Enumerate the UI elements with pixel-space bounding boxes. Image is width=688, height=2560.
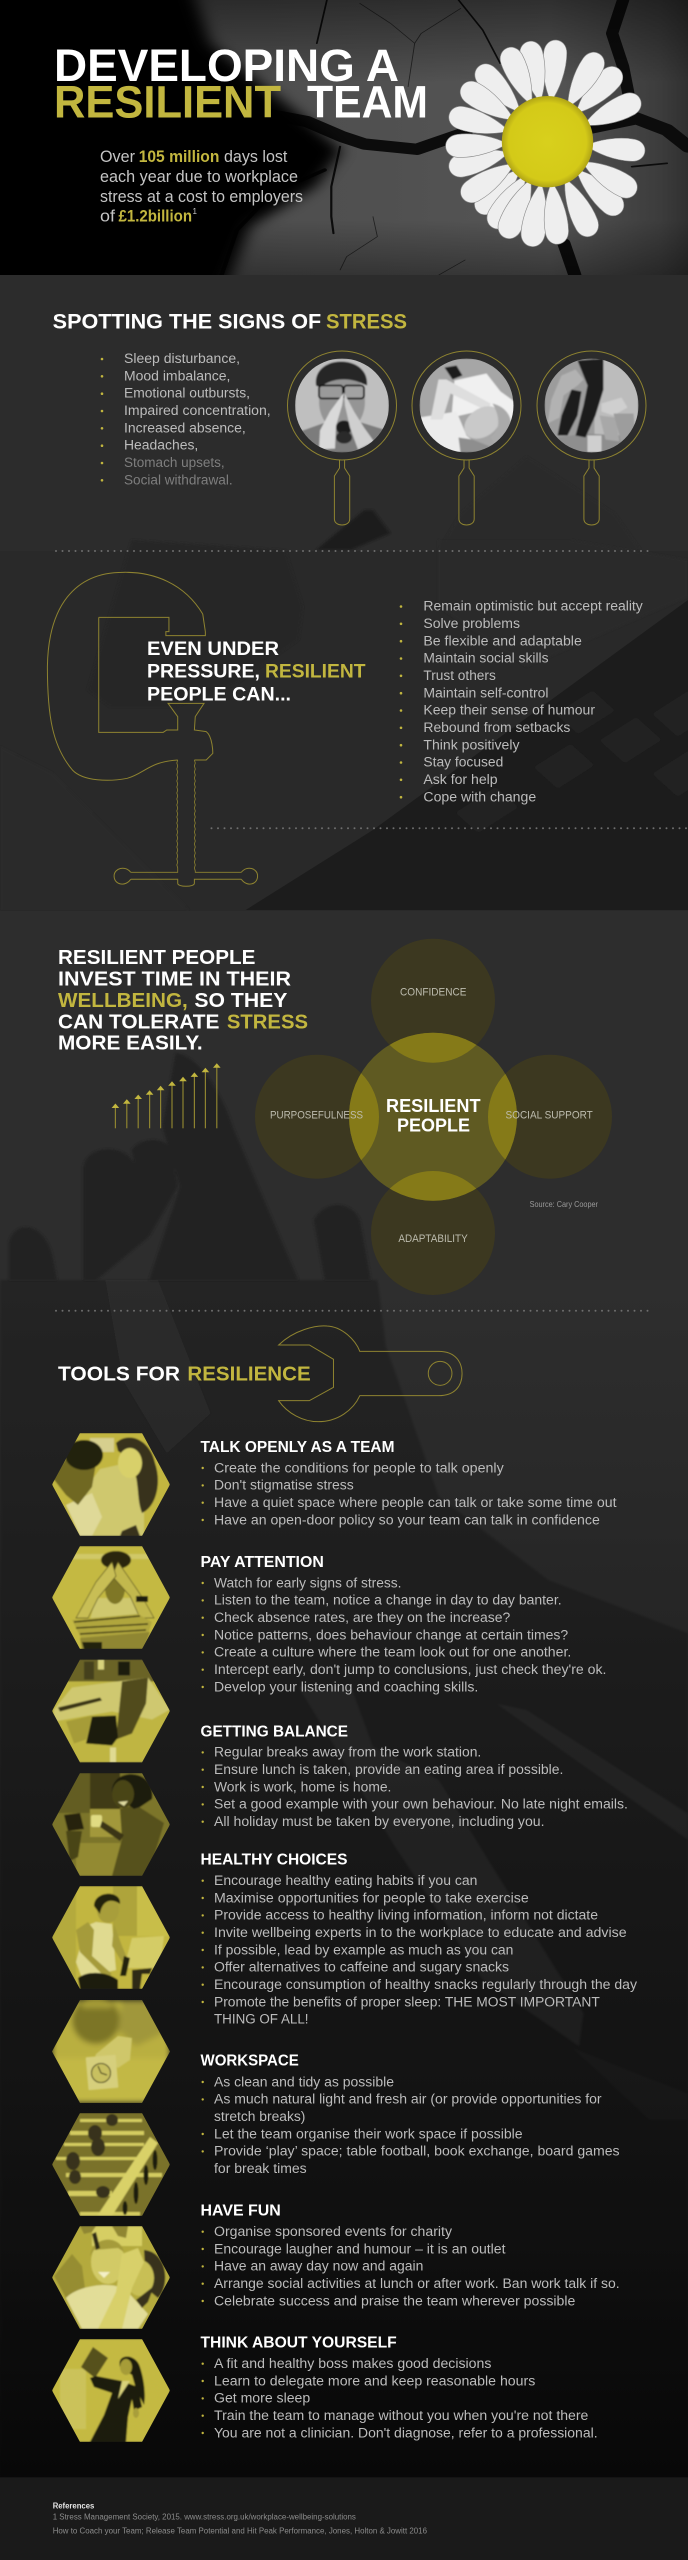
text block: intro statistic (100, 147, 303, 226)
heading: even under pressure: PEOPLE CAN... (147, 684, 291, 705)
text block: pay attention: PAY ATTENTION (200, 1554, 324, 1571)
panel: resilient people can background (0, 540, 688, 911)
image: hexagon table football (52, 2113, 170, 2216)
text block: intro statistic: 1 (192, 207, 198, 216)
labels: venn text: SOCIAL SUPPORT (506, 1110, 593, 1122)
heading: spotting the signs of stress: SPOTTING THE SIGNS OF (53, 310, 321, 334)
circle: purposefulness (255, 1055, 379, 1179)
icon: g-clamp outline (47, 572, 258, 886)
text block: think about yourself: You are not a clinician. Don't diagnose, refer to a professional. (214, 2425, 598, 2440)
text block: think about yourself: Get more sleep (214, 2391, 310, 2406)
labels: venn text: ADAPTABILITY (398, 1233, 468, 1245)
chart: resilient people venn diagram (255, 939, 612, 1295)
text block: healthy choices: Provide access to healthy living information, inform not dictate (214, 1908, 598, 1923)
heading: wellbeing statement: STRESS (227, 1010, 308, 1033)
circle: confidence (371, 939, 495, 1063)
icon: mirror with stressed man (288, 351, 396, 525)
text block: have fun: Celebrate success and praise the team wherever possible (214, 2293, 575, 2308)
text block: workspace: As much natural light and fresh air (or provide opportunities for (214, 2092, 602, 2107)
heading: wellbeing statement: CAN TOLERATE (58, 1010, 219, 1033)
heading: wellbeing statement (58, 946, 308, 1054)
title: DEVELOPING A (54, 40, 399, 91)
circle: adaptability (371, 1171, 495, 1295)
panel: tools background (0, 1053, 688, 2480)
list: signs of stress: Impaired concentration, (124, 403, 271, 418)
list: what resilient people can do: Remain optimistic but accept reality (423, 599, 643, 614)
title: TEAM (307, 76, 428, 128)
text block: think about yourself: A fit and healthy boss makes good decisions (214, 2356, 492, 2371)
text block: intro statistic: days lost (224, 147, 288, 166)
text block: talk openly: TALK OPENLY AS A TEAM (200, 1439, 394, 1456)
text block: talk openly: Create the conditions for people to talk openly (214, 1460, 504, 1475)
image: hexagon celebrating man (52, 2226, 170, 2329)
heading: wellbeing statement: INVEST TIME IN THEIR (58, 967, 291, 990)
list: what resilient people can do: Stay focused (423, 755, 503, 770)
text block: healthy choices: THING OF ALL! (214, 2012, 308, 2027)
text block: have fun: Organise sponsored events for charity (214, 2224, 452, 2239)
text block: think about yourself: Learn to delegate more and keep reasonable hours (214, 2373, 536, 2388)
image: hexagon stressed man at desk (52, 1546, 170, 1649)
labels: venn text: RESILIENT (386, 1096, 480, 1116)
icon: spanner outline (279, 1326, 462, 1422)
text block: pay attention (200, 1554, 606, 1694)
text block: think about yourself: Train the team to manage without you when you're not there (214, 2408, 588, 2423)
text block: have fun: Encourage laugher and humour – it is an outlet (214, 2241, 506, 2256)
list: what resilient people can do: Solve problems (423, 616, 520, 631)
heading: tools for resilience (58, 1363, 311, 1386)
list: signs of stress: Headaches, (124, 438, 198, 453)
text block: intro statistic: £1.2billion (118, 207, 192, 226)
text block: workspace: stretch breaks) (214, 2109, 305, 2124)
text block: source credit: Source: Cary Cooper (530, 1200, 598, 1209)
text block: references: References (53, 2501, 95, 2510)
text block: pay attention: Notice patterns, does behaviour change at certain times? (214, 1627, 568, 1642)
panel: signs of stress background (0, 275, 688, 551)
text block: think about yourself: THINK ABOUT YOURSELF (200, 2334, 397, 2351)
text block: getting balance: Ensure lunch is taken, provide an eating area if possible. (214, 1762, 563, 1777)
chart: rising arrows (112, 1063, 221, 1128)
text block: healthy choices: Promote the benefits of proper sleep: THE MOST IMPORTANT (214, 1994, 600, 2009)
text block: healthy choices: HEALTHY CHOICES (200, 1851, 348, 1868)
heading: tools for resilience: TOOLS FOR (58, 1363, 180, 1386)
list: signs of stress: Social withdrawal. (124, 472, 233, 487)
decorative dots: divider three (56, 1310, 648, 1312)
heading: even under pressure (147, 639, 366, 705)
title (54, 40, 428, 128)
circle: resilient people core (349, 1033, 517, 1201)
list: signs of stress: Increased absence, (124, 420, 246, 435)
heading: spotting the signs of stress: STRESS (326, 310, 407, 334)
labels: venn text: PURPOSEFULNESS (270, 1110, 363, 1122)
text block: talk openly: Don't stigmatise stress (214, 1478, 354, 1493)
text block: healthy choices: Maximise opportunities for people to take exercise (214, 1890, 529, 1905)
list: signs of stress: Mood imbalance, (124, 368, 230, 383)
text block: workspace (200, 2053, 620, 2176)
text block: healthy choices: Encourage healthy eating habits if you can (214, 1873, 477, 1888)
text block: workspace: for break times (214, 2161, 307, 2176)
text block: talk openly: Have an open-door policy so your team can talk in confidence (214, 1512, 600, 1527)
icon: mirror with woman lying down (412, 351, 521, 525)
text block: talk openly: Have a quiet space where people can talk or take some time out (214, 1495, 617, 1510)
image: hexagon office chair (52, 1660, 170, 1762)
list: what resilient people can do: Be flexible and adaptable (423, 633, 582, 648)
text block: healthy choices: Encourage consumption of healthy snacks regularly through the day (214, 1977, 637, 1992)
text block: healthy choices: Invite wellbeing experts in to the workplace to educate and advise (214, 1925, 627, 1940)
icon: mirror with woman holding pills (537, 351, 646, 525)
text block: workspace: WORKSPACE (200, 2053, 299, 2070)
text block: getting balance: Regular breaks away from the work station. (214, 1745, 481, 1760)
text block: pay attention: Develop your listening and coaching skills. (214, 1679, 478, 1694)
text block: getting balance: Set a good example with your own behaviour. No late night emails. (214, 1797, 628, 1812)
text block: workspace: Let the team organise their work space if possible (214, 2126, 523, 2141)
text block: intro statistic: Over (100, 147, 135, 166)
icon: daisy flower (445, 39, 646, 248)
list: signs of stress (101, 351, 271, 487)
list: signs of stress: Emotional outbursts, (124, 386, 250, 401)
text block: intro statistic: each year due to workplace (100, 167, 298, 186)
text block: have fun (200, 2202, 620, 2308)
panel: wellbeing background (0, 911, 688, 1280)
labels: venn text: CONFIDENCE (400, 987, 466, 999)
text block: intro statistic: 105 million (139, 147, 219, 166)
text block: getting balance: All holiday must be taken by everyone, including you. (214, 1814, 544, 1829)
list: what resilient people can do: Maintain social skills (423, 651, 549, 666)
labels: venn text: PEOPLE (397, 1115, 470, 1135)
text block: have fun: HAVE FUN (200, 2202, 281, 2219)
heading: even under pressure: EVEN UNDER (147, 639, 279, 660)
title: RESILIENT (54, 76, 281, 128)
text block: talk openly (200, 1439, 617, 1527)
panel: header background (0, 0, 688, 313)
image: hexagon man on exercise bike (52, 1886, 170, 1989)
heading: wellbeing statement: SO THEY (194, 989, 288, 1012)
text block: pay attention: Watch for early signs of stress. (214, 1575, 402, 1590)
image: hexagon two people talking (52, 1433, 170, 1536)
circle: social support (488, 1055, 612, 1179)
text block: healthy choices (200, 1851, 637, 2027)
list: signs of stress: Sleep disturbance, (124, 351, 240, 366)
text block: pay attention: Intercept early, don't jump to conclusions, just check they're ok. (214, 1662, 606, 1677)
heading: wellbeing statement: MORE EASILY. (58, 1031, 203, 1054)
image: hexagon smiling man with mug (52, 1773, 170, 1876)
heading: even under pressure: PRESSURE, (147, 662, 260, 683)
list: what resilient people can do: Trust others (423, 668, 496, 683)
heading: wellbeing statement: WELLBEING, (58, 989, 188, 1012)
text block: getting balance: Work is work, home is home. (214, 1779, 391, 1794)
decorative dots: divider one (56, 550, 648, 552)
labels: venn text (270, 987, 593, 1245)
text block: references (53, 2501, 428, 2535)
list: what resilient people can do: Maintain self-control (423, 685, 549, 700)
list: signs of stress: Stomach upsets, (124, 455, 225, 470)
list: what resilient people can do: Cope with change (423, 789, 536, 804)
text block: references: How to Coach your Team; Release Team Potential and Hit Peak Performance, Jones, Holton & Jowitt 2016 (53, 2526, 428, 2535)
decorative dots: divider two (212, 827, 688, 829)
text block: pay attention: Create a culture where the team look out for one another. (214, 1645, 571, 1660)
text block: workspace: As clean and tidy as possible (214, 2074, 394, 2089)
text block: think about yourself (200, 2334, 598, 2440)
list: what resilient people can do: Rebound from setbacks (423, 720, 571, 735)
text block: references: 1 Stress Management Society, 2015. www.stress.org.uk/workplace-wellbeing-solutions (53, 2513, 356, 2522)
panel: footer background (0, 2477, 688, 2560)
text block: pay attention: Check absence rates, are they on the increase? (214, 1610, 510, 1625)
text block: healthy choices: Offer alternatives to caffeine and sugary snacks (214, 1960, 509, 1975)
text block: have fun: Have an away day now and again (214, 2259, 423, 2274)
text block: getting balance: GETTING BALANCE (200, 1723, 348, 1740)
heading: even under pressure: RESILIENT (265, 662, 366, 683)
text block: intro statistic: of (100, 207, 115, 226)
text block: have fun: Arrange social activities at lunch or after work. Ban work talk if so. (214, 2276, 620, 2291)
heading: wellbeing statement: RESILIENT PEOPLE (58, 946, 255, 969)
text block: workspace: Provide ‘play’ space; table football, book exchange, board games (214, 2144, 620, 2159)
heading: tools for resilience: RESILIENCE (187, 1363, 311, 1386)
image: hexagon alarm clock (52, 1996, 170, 2103)
text block: pay attention: Listen to the team, notice a change in day to day banter. (214, 1593, 562, 1608)
image: hexagon businesswoman with clipboard (52, 2339, 170, 2442)
text block: getting balance (200, 1723, 628, 1829)
list: what resilient people can do: Think positively (423, 737, 520, 752)
text block: healthy choices: If possible, lead by example as much as you can (214, 1942, 513, 1957)
list: what resilient people can do: Ask for help (423, 772, 498, 787)
list: what resilient people can do: Keep their sense of humour (423, 703, 596, 718)
list: what resilient people can do (400, 599, 643, 804)
text block: intro statistic: stress at a cost to employers (100, 187, 303, 206)
